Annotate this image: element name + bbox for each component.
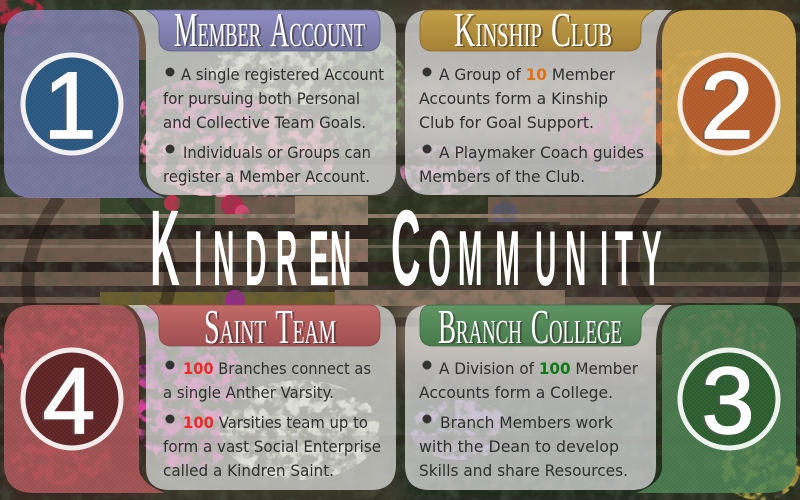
body text 2: Members of the Club. — [419, 167, 585, 186]
body text 1: for pursuing both Personal — [163, 89, 360, 108]
heading banner 3 — [420, 305, 655, 346]
swoosh 4 — [122, 304, 146, 355]
body text 2: A Group of 10 Member — [439, 65, 615, 84]
heading 3: BRANCH COLLEGE — [438, 299, 622, 354]
number badge 2 — [680, 53, 778, 159]
body text 2 — [419, 65, 644, 186]
body text 2: A Playmaker Coach guides — [439, 143, 644, 162]
heading banner 1 — [146, 10, 380, 51]
heading banner 4 — [146, 305, 380, 346]
number badge 3: 3 — [702, 348, 754, 454]
central plank band — [0, 194, 800, 310]
heading 2: KINSHIP CLUB — [454, 2, 612, 57]
heading 4: SAINT TEAM — [204, 299, 336, 354]
body text 4: 100 Varsities team up to — [183, 413, 368, 432]
text card 4 — [128, 305, 396, 490]
colored tab 2 — [636, 10, 796, 198]
body text 1 — [163, 65, 384, 186]
body text 2: Club for Goal Support. — [419, 113, 594, 132]
body text 1: and Collective Team Goals. — [163, 113, 366, 132]
number badge 3 — [680, 348, 778, 454]
body text 3: Accounts form a College. — [419, 383, 613, 402]
body text 3: A Division of 100 Member — [439, 359, 638, 378]
panel 1: Member Account — [4, 2, 396, 198]
colored tab 1 — [4, 10, 165, 198]
swoosh 2 — [656, 9, 678, 60]
panel 4: Saint Team — [4, 299, 396, 493]
panel 3: Branch College — [405, 299, 796, 493]
colored tab 4 — [4, 305, 165, 493]
heading banner 2 — [420, 10, 655, 51]
swoosh 3 — [656, 304, 678, 355]
text card 3 — [405, 305, 672, 490]
body text 3: with the Dean to develop — [419, 437, 619, 456]
body text 1: register a Member Account. — [163, 167, 370, 186]
body text 4: a single Anther Varsity. — [163, 383, 334, 402]
body text 3 — [419, 359, 638, 480]
body text 4: 100 Branches connect as — [183, 359, 371, 378]
body text 3: Branch Members work — [440, 413, 614, 432]
main title: KINDREN COMMUNITY — [150, 188, 662, 309]
number badge 1: 1 — [44, 53, 96, 159]
number badge 4: 4 — [43, 348, 95, 453]
number badge 1 — [23, 53, 121, 159]
body text 2: Accounts form a Kinship — [419, 89, 608, 108]
body text 1: A single registered Account — [181, 65, 384, 84]
body text 4: called a Kindren Saint. — [163, 461, 334, 480]
body text 4: form a vast Social Enterprise — [163, 437, 381, 456]
body text 1: Individuals or Groups can — [183, 143, 371, 162]
colored tab 3 — [636, 305, 796, 493]
swoosh 1 — [122, 9, 146, 60]
panel 2: Kinship Club — [405, 2, 796, 198]
number badge 2: 2 — [701, 53, 753, 159]
body text 4 — [163, 359, 381, 480]
heading 1: MEMBER ACCOUNT — [174, 2, 365, 57]
text card 2 — [405, 10, 672, 195]
text card 1 — [128, 10, 396, 195]
body text 3: Skills and share Resources. — [419, 461, 628, 480]
number badge 4 — [23, 348, 121, 453]
